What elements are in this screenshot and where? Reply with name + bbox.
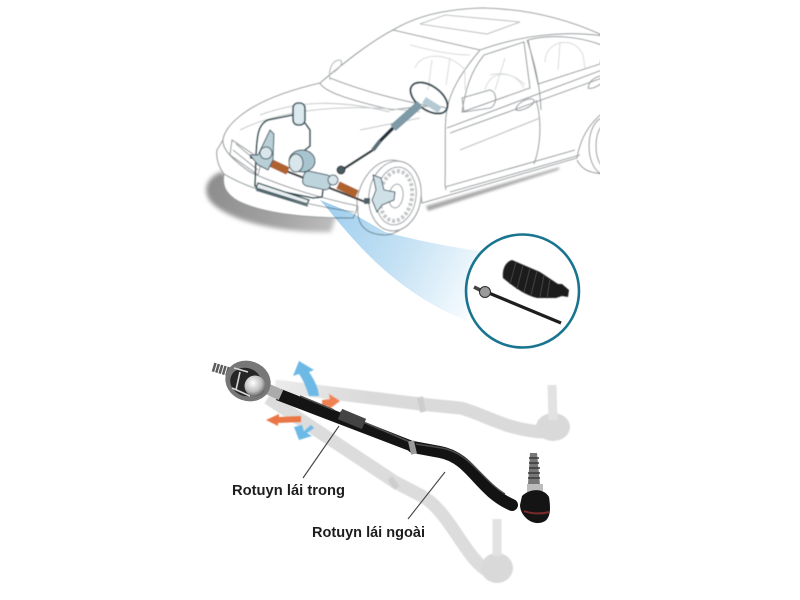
car silhouette fill	[221, 80, 449, 218]
steering rack	[250, 130, 395, 212]
motion arrow orange right	[322, 394, 340, 410]
ghost tie rod lower	[268, 398, 513, 583]
threaded stud	[213, 367, 230, 372]
label: outer tie rod: Rotuyn lái ngoài	[312, 525, 425, 541]
label: inner tie rod: Rotuyn lái trong	[232, 483, 345, 499]
motion arrow orange left	[266, 414, 301, 426]
callout circle with parts	[466, 234, 579, 348]
ground shadow under car	[206, 172, 336, 232]
circle frame	[466, 234, 579, 348]
inner tie rod	[484, 291, 561, 323]
leader line: inner	[303, 426, 339, 478]
car seats and interior	[410, 42, 585, 90]
rubber boot	[503, 260, 569, 298]
outer ball joint and stud	[520, 453, 550, 523]
sill shadow	[426, 167, 560, 211]
tie rod diagram	[213, 354, 570, 583]
leader line: outer	[408, 472, 445, 519]
hoses and reservoir	[255, 103, 323, 206]
ball joint housing	[220, 354, 276, 408]
main inner rod	[276, 389, 413, 452]
ghost tie rod upper	[275, 385, 570, 441]
motion arrow blue down	[294, 425, 314, 440]
outer tie rod	[413, 447, 512, 505]
illustration: car with steering system	[217, 8, 619, 236]
car body outline	[217, 8, 604, 218]
motion arrow blue up	[293, 361, 319, 396]
front wheel	[358, 158, 426, 235]
steering wheel and column	[337, 76, 453, 174]
callout beam	[320, 200, 480, 321]
rear wheel	[588, 118, 600, 174]
